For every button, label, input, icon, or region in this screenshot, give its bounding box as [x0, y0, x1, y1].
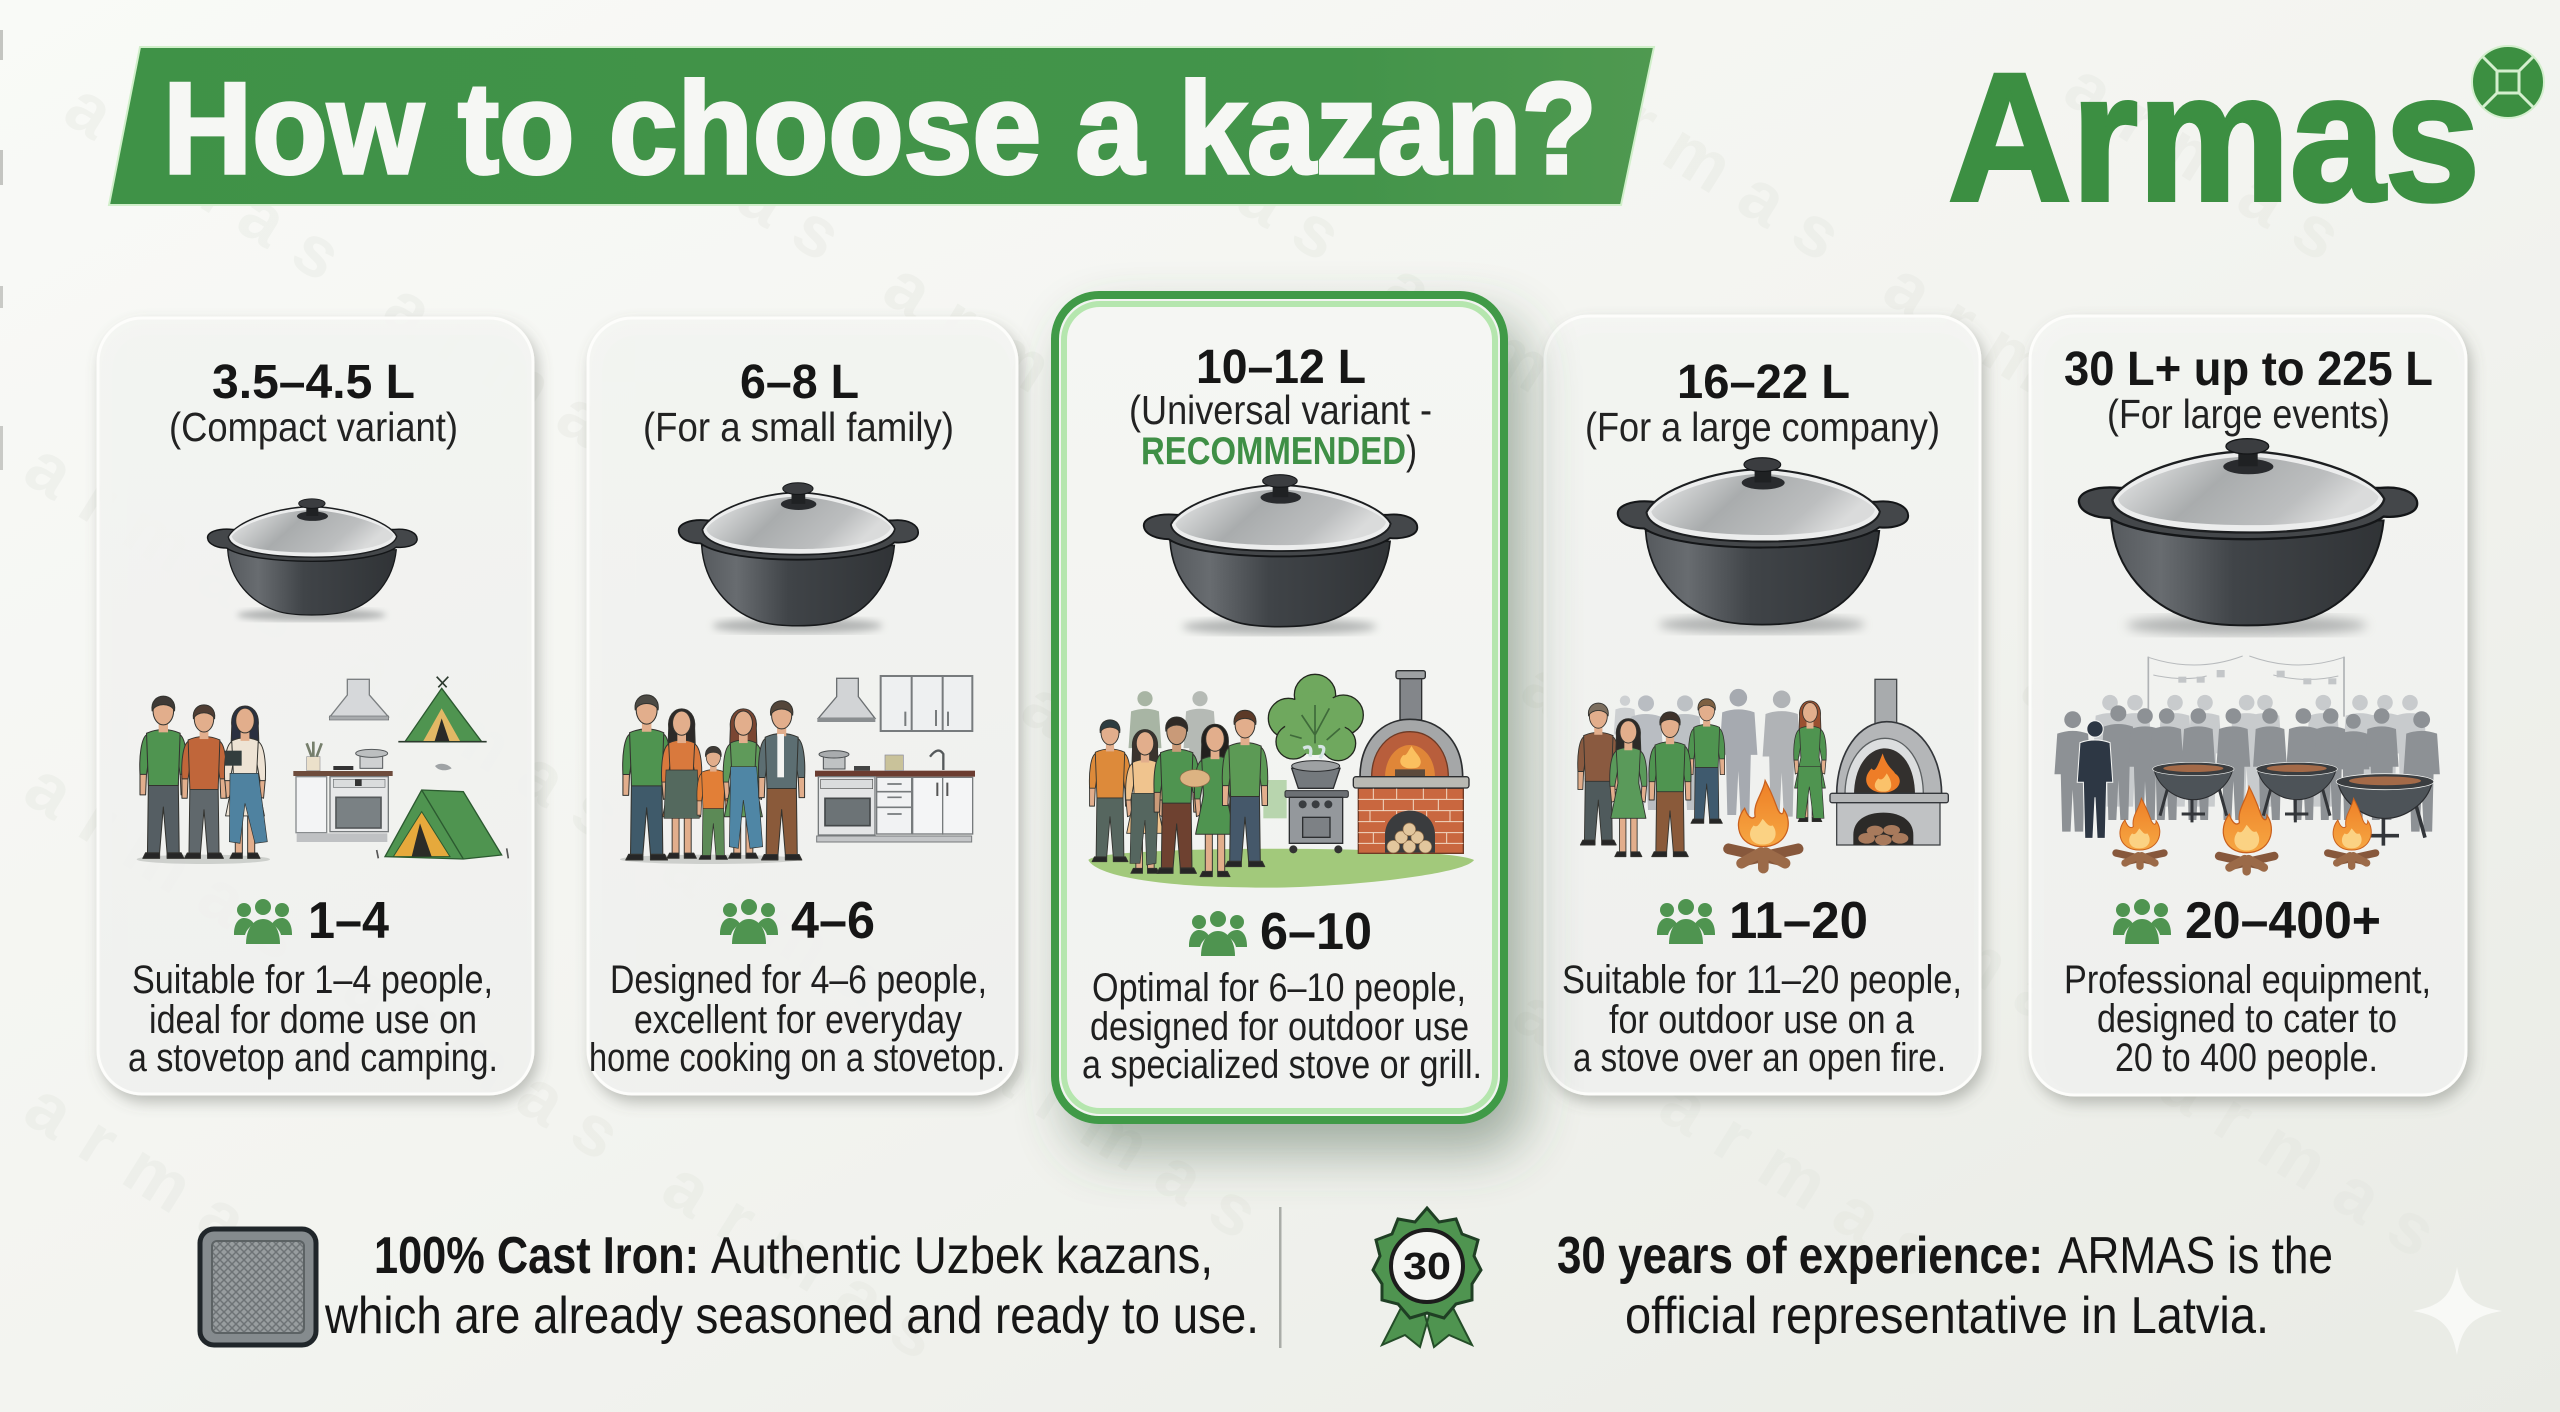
- capacity heading: 30 L+ up to 225 L: [2064, 343, 2433, 396]
- description: [128, 958, 498, 1080]
- description: Designed for 4–6 people,: [610, 958, 987, 1002]
- scene: group, campfire and oven: [1578, 679, 1948, 868]
- panel: 6–8 L card: [588, 318, 1017, 1094]
- kazan illustration: [2079, 439, 2417, 635]
- closing parenthesis: ): [1406, 427, 1417, 473]
- card background: [2030, 316, 2466, 1095]
- icon: 30 years badge: [1373, 1208, 1481, 1347]
- scene: crowd, grills and fires: [2054, 656, 2440, 871]
- people count: 6–10: [1260, 903, 1372, 961]
- description: [1082, 966, 1482, 1087]
- cast iron bold label: 100% Cast Iron:: [374, 1227, 699, 1285]
- text: armas armas: [1552, 46, 2195, 489]
- people icon: [234, 899, 292, 944]
- experience bold label: 30 years of experience:: [1557, 1227, 2043, 1285]
- people icon: [1657, 899, 1715, 944]
- text: armas armas armas armas armas armas: [552, 46, 2471, 1286]
- description: Professional equipment,: [2064, 958, 2431, 1002]
- people count: 20–400+: [2185, 892, 2381, 950]
- description: [2064, 958, 2431, 1080]
- panel: 30 L+ card: [2030, 316, 2466, 1095]
- text: armas armas armas armas: [1052, 46, 2333, 888]
- text: armas armas armas armas armas armas: [52, 66, 1971, 1306]
- cast iron text line 2: which are already seasoned and ready to use.: [324, 1287, 1259, 1345]
- description: designed for outdoor use: [1090, 1005, 1469, 1049]
- description: Suitable for 1–4 people,: [132, 958, 493, 1002]
- description: a stovetop and camping.: [128, 1036, 498, 1080]
- scene: group, stove and brick oven: [1088, 671, 1474, 888]
- panel: 3.5–4.5 L card: [98, 318, 533, 1094]
- description: ideal for dome use on: [149, 998, 477, 1042]
- description: home cooking on a stovetop.: [589, 1036, 1005, 1080]
- people count: 1–4: [308, 892, 389, 950]
- description: a stove over an open fire.: [1573, 1036, 1946, 1080]
- description: 20 to 400 people.: [2115, 1036, 2378, 1080]
- people count: 11–20: [1729, 892, 1868, 950]
- text: armas: [12, 1066, 336, 1310]
- text: armas armas armas: [12, 746, 974, 1388]
- footer: cast iron: [200, 1227, 1259, 1345]
- panel: 10–12 L recommended card: [1055, 295, 1504, 1120]
- people icon: [1189, 911, 1247, 956]
- logo: Armas: [1948, 35, 2544, 239]
- title banner: [109, 47, 1654, 205]
- badge number: 30: [1403, 1246, 1451, 1288]
- title: How to choose a kazan?: [163, 55, 1597, 201]
- footer: experience: [1373, 1208, 2333, 1347]
- text: armas armas armas armas: [12, 426, 1293, 1268]
- logo wordmark: Armas: [1948, 35, 2480, 239]
- capacity heading: 16–22 L: [1677, 356, 1850, 409]
- people icon: [2113, 899, 2171, 944]
- people icon: [720, 899, 778, 944]
- capacity heading: 6–8 L: [740, 356, 859, 409]
- description: a specialized stove or grill.: [1082, 1043, 1482, 1087]
- text: armas: [2052, 46, 2376, 290]
- people count: 4–6: [791, 892, 875, 950]
- capacity heading: 3.5–4.5 L: [212, 356, 415, 409]
- card background: [1545, 316, 1980, 1094]
- variant subtitle: (For a large company): [1585, 404, 1940, 450]
- card background: [588, 318, 1017, 1094]
- description: for outdoor use on a: [1609, 998, 1915, 1042]
- kazan illustration: [679, 483, 918, 633]
- cast iron text line 1: Authentic Uzbek kazans,: [711, 1227, 1213, 1285]
- highlighted card background: [1055, 295, 1504, 1120]
- capacity heading: 10–12 L: [1196, 341, 1366, 394]
- variant subtitle: (For a small family): [643, 404, 954, 450]
- variant subtitle: (Universal variant -: [1129, 387, 1432, 433]
- description: [1562, 958, 1962, 1080]
- description: Suitable for 11–20 people,: [1562, 958, 1962, 1002]
- experience text line 1: ARMAS is the: [2058, 1227, 2333, 1285]
- scene: family, kitchen and tents: [137, 677, 508, 864]
- card background: [98, 318, 533, 1094]
- kazan illustration: [1144, 475, 1417, 635]
- kazan illustration: [1618, 458, 1908, 633]
- variant subtitle: (For large events): [2107, 391, 2390, 437]
- description: [589, 958, 1005, 1080]
- scene: family and kitchen: [620, 676, 975, 864]
- description: designed to cater to: [2097, 997, 2397, 1041]
- kazan illustration: [208, 499, 417, 621]
- description: excellent for everyday: [634, 998, 962, 1042]
- icon: cast iron square: [200, 1229, 316, 1345]
- recommended label: RECOMMENDED: [1141, 430, 1406, 473]
- experience text line 2: official representative in Latvia.: [1625, 1287, 2269, 1345]
- variant subtitle: (Compact variant): [169, 404, 458, 450]
- icon: sparkle: [2413, 1267, 2502, 1355]
- logo emblem: [2472, 46, 2544, 118]
- panel: 16–22 L card: [1545, 316, 1980, 1094]
- description: Optimal for 6–10 people,: [1092, 966, 1466, 1010]
